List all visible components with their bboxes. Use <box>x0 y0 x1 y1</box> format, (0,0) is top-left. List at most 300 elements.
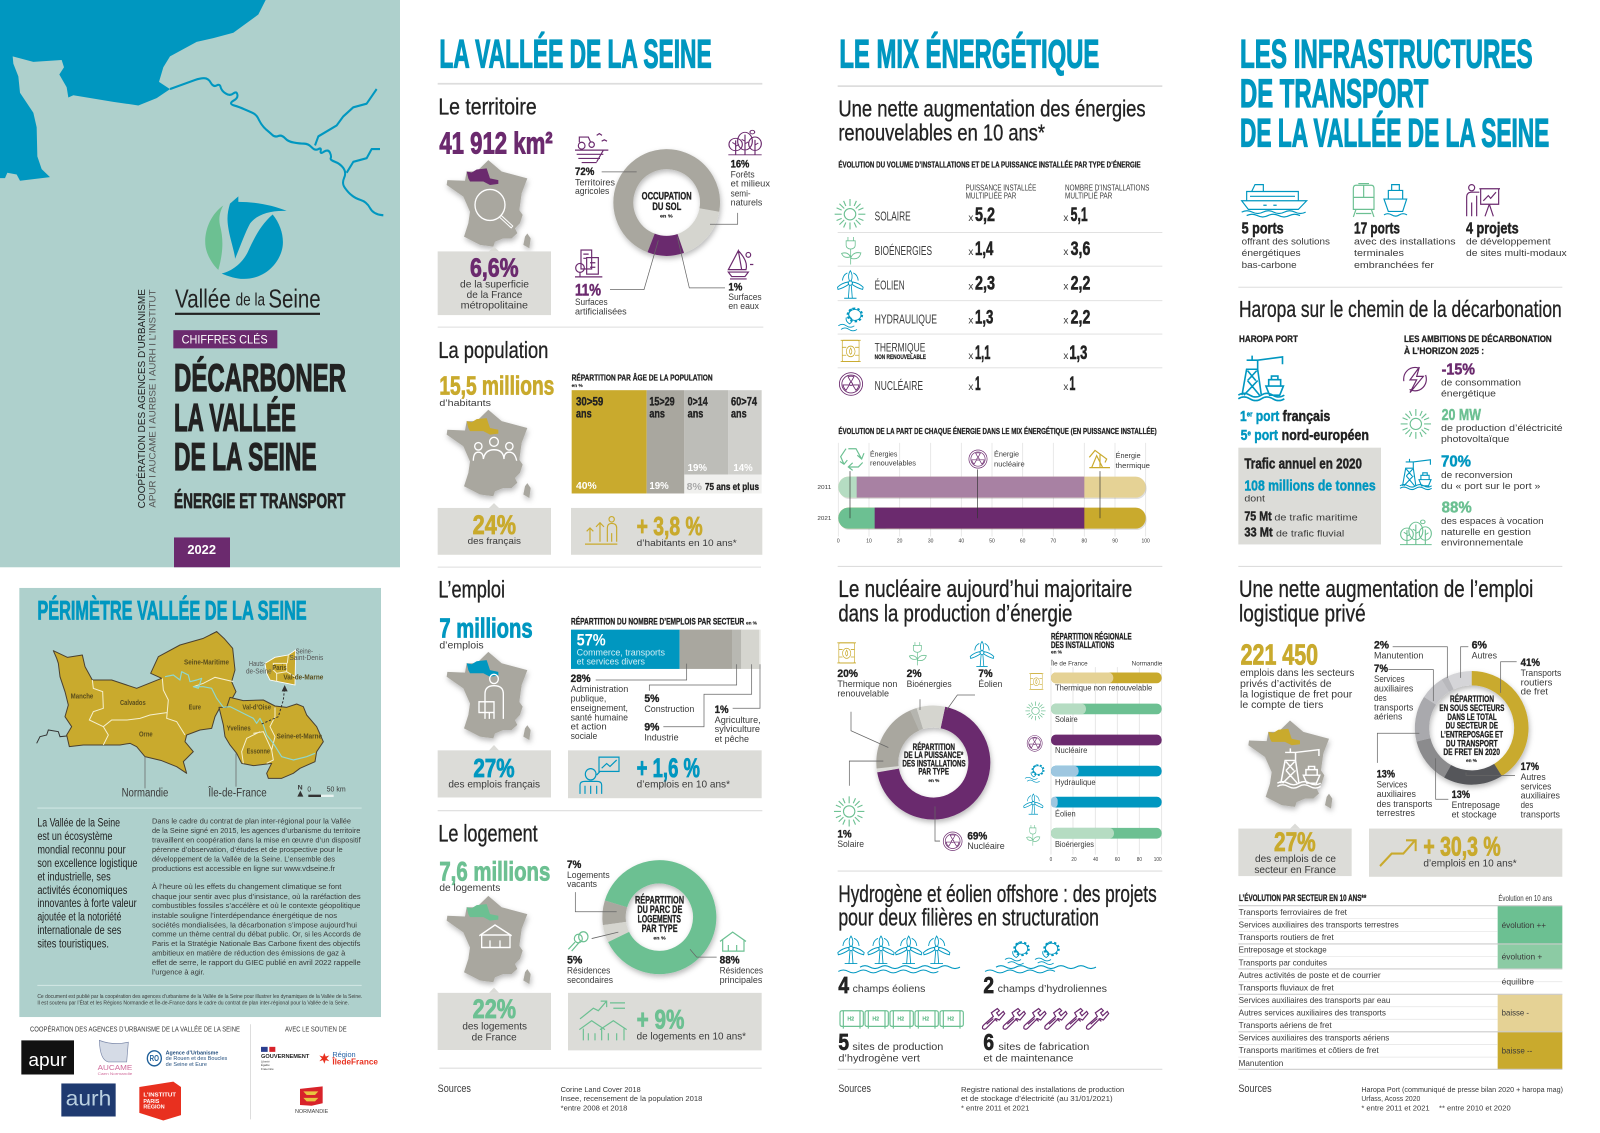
map of regions and departments: Paris <box>272 665 287 672</box>
stat: 4 projets <box>1466 185 1567 259</box>
label: résidences principales <box>690 949 763 985</box>
label: manutention <box>1374 640 1447 678</box>
map of regions and departments: Essonne <box>247 749 270 756</box>
bar chart: répartition régionale: Normandie <box>1132 661 1163 668</box>
partner logos: GOUVERNEMENT <box>261 1054 309 1060</box>
callout: +3,8% <box>571 508 762 555</box>
table: évolution par type d'énergie: 1 <box>1069 374 1076 395</box>
label: autres services: Autres <box>1521 772 1546 782</box>
callout: +1,6%: + 1,6 % <box>637 752 700 783</box>
icon: house <box>720 932 746 951</box>
key figure: 221 450 emplois: 221 450 <box>1241 638 1318 670</box>
heading: renouvelables en 10 ans* <box>838 119 1045 146</box>
table: évolution par type d'énergie: x <box>1063 281 1068 293</box>
text block: context: chaque jour sentir avec plus d’insistance, où la raréfaction des <box>152 894 361 901</box>
bar chart: part de chaque énergie: 90 <box>1112 539 1118 545</box>
stacked bar: emplois par secteur: Construction <box>644 704 695 714</box>
block: ambitions de décarbonation: environnementale <box>1441 537 1523 549</box>
block: ambitions de décarbonation: photovoltaïque <box>1441 434 1509 445</box>
text block: context: comme un thème central du débat public. Or, si les Accords de <box>152 931 361 939</box>
stat: sites hydrogène vert: H2 <box>947 1017 954 1023</box>
region labels: Normandie <box>122 786 168 800</box>
table: évolution par secteur: Transports routiers de fret <box>1239 933 1335 942</box>
block: ambitions de décarbonation: LES AMBITIONS DE DÉCARBONATION <box>1404 334 1552 345</box>
partner logos: Caen Normandie <box>98 1072 132 1076</box>
table: évolution par type d'énergie: x <box>968 315 973 326</box>
text block: intro: ajoutée et la notoriété <box>37 911 121 924</box>
stat: sites hydrogène vert: H2 <box>897 1017 904 1023</box>
map of regions and departments: Seine-et-Marne <box>277 734 322 741</box>
bar chart: part de chaque énergie: 100 <box>1141 539 1150 545</box>
treemap: répartition par âge: 75 ans et plus <box>705 482 759 493</box>
donut chart: sous secteurs <box>1403 659 1540 797</box>
label: thermique <box>837 643 897 747</box>
callout: trafic annuel: de trafic fluvial <box>1276 528 1344 540</box>
table: évolution par secteur: Évolution en 10 ans <box>1498 893 1552 903</box>
stat: sites hydrogène vert: H2 <box>922 1017 929 1023</box>
bar chart: part de chaque énergie: 0 <box>837 539 840 545</box>
table: évolution par type d'énergie: x <box>968 351 973 362</box>
label: entreposage: et stockage <box>1452 809 1497 820</box>
block: ambitions de décarbonation: -15% <box>1442 361 1475 379</box>
panel: Les infrastructures de transport <box>1238 33 1567 549</box>
callout: 6,6%: de la France <box>467 290 523 301</box>
label: logements vacants: vacants <box>567 879 597 889</box>
label: services terrestres <box>1377 733 1432 818</box>
stat: 17 ports <box>1353 184 1456 271</box>
table: évolution par secteur: L’ÉVOLUTION PAR SECTEUR EN 10 ANS** <box>1239 893 1367 903</box>
logo wordmark <box>175 285 321 315</box>
stat: champs d'hydroliennes: champs d’hydroliennes <box>998 984 1107 995</box>
stat: sites hydrogène vert <box>838 1011 963 1065</box>
heading: hydrogène et éolien offshore <box>838 880 1157 931</box>
partner logos: AUCAME <box>98 1063 132 1072</box>
table: évolution par type d'énergie: x <box>968 281 973 293</box>
title: ÉNERGIE ET TRANSPORT <box>174 489 346 513</box>
stat: 5 ports: bas-carbone <box>1242 260 1297 271</box>
table: évolution par type d'énergie: x <box>968 213 973 224</box>
stat: champs éoliens: 4 <box>838 972 850 998</box>
callout: 24% <box>438 503 551 555</box>
table: évolution par type d'énergie: x <box>968 382 973 393</box>
text block: intro: est un écosystème <box>37 831 112 843</box>
table: évolution par type d'énergie: 1,1 <box>975 343 991 364</box>
label: transports routiers: Transports <box>1521 668 1561 678</box>
vertical credit <box>135 289 158 508</box>
label: territoires agricoles: agricoles <box>575 186 610 196</box>
sources: Haropa Port (communiqué de presse bilan 2020 + haropa mag) <box>1361 1085 1563 1094</box>
table: évolution par secteur: Services auxiliaires des transports aériens <box>1239 1033 1390 1043</box>
partner logos: PARIS <box>143 1099 160 1105</box>
table: évolution par type d'énergie: 1 <box>975 374 981 395</box>
label: autres: 6% <box>1472 640 1487 652</box>
label: services aériens: auxiliaires <box>1374 683 1413 693</box>
map of regions and departments: Manche <box>71 693 93 700</box>
label: manutention: Manutention <box>1374 650 1424 661</box>
table: évolution par type d'énergie: 2,2 <box>1071 307 1090 328</box>
stat: sites de fabrication <box>982 1009 1109 1065</box>
treemap: répartition par âge: ans <box>688 407 703 421</box>
bar chart: répartition régionale: Nucléaire <box>1055 746 1088 755</box>
heading: le territoire: Le territoire <box>438 93 537 120</box>
label: forêts: naturels <box>731 197 763 208</box>
bar chart: part de chaque énergie: 2021 <box>817 516 832 522</box>
donut chart: puissance par type: DE LA PUISSANCE* <box>904 750 964 760</box>
heading: Une nette augmentation des énergies <box>838 95 1146 121</box>
vertical credit: APUR I AUCAME I AURBSE I AURH I L’INSTITUT <box>147 289 158 508</box>
map of regions and departments: de-Seine <box>246 668 272 675</box>
bar chart: répartition régionale: 20 <box>1071 857 1077 863</box>
block: Haropa port: nord-européen <box>1282 428 1369 444</box>
label: autres services: des <box>1521 800 1533 810</box>
text block: intro: et industrielle, ses <box>37 871 111 884</box>
partner logos: Région <box>332 1050 356 1059</box>
block: ambitions de décarbonation: 88% <box>1442 499 1472 516</box>
text block: context: À l’heure où les effets du changement climatique se font <box>152 882 341 891</box>
table: évolution par type d'énergie: x <box>968 247 973 258</box>
stat: sites hydrogène vert: d’hydrogène vert <box>838 1053 920 1065</box>
sources: Sources <box>838 1084 871 1095</box>
bar chart: part de chaque énergie: 10 <box>866 539 872 545</box>
key figure: habitants <box>439 372 554 409</box>
bar chart: répartition régionale: 60 <box>1115 857 1120 863</box>
logo wordmark: Vallée <box>175 285 231 314</box>
partner logos: NORMANDIE <box>295 1109 329 1115</box>
region labels: Île-de-France <box>208 785 267 800</box>
stat: champs d'hydroliennes: 2 <box>983 972 994 998</box>
scale bar: 50 km <box>327 787 346 794</box>
bar chart: répartition régionale: Hydraulique <box>1055 778 1096 787</box>
sources <box>1238 1084 1563 1112</box>
label: services terrestres: des transports <box>1377 799 1432 809</box>
donut chart: puissance par type: RÉPARTITION <box>913 742 955 752</box>
treemap: répartition par âge: ans <box>649 407 665 421</box>
bar chart: part de chaque énergie: nucléaire <box>994 459 1025 468</box>
partner logos: RO <box>150 1054 159 1063</box>
stacked bar: emplois par secteur <box>571 616 761 744</box>
stacked bar: emplois par secteur: 57% <box>577 632 606 650</box>
block: ambitions de décarbonation: du « port sur le port » <box>1441 481 1540 492</box>
label: transports routiers: de fret <box>1521 686 1549 697</box>
sources: Insee, recensement de la population 2018 <box>561 1094 702 1103</box>
tag: year: 2022 <box>187 543 216 557</box>
heading: hydrogène et éolien offshore: Hydrogène et éolien offshore : des projets <box>838 880 1157 907</box>
stacked bar: emplois par secteur: RÉPARTITION DU NOMBRE D’EMPLOIS PAR SECTEUR <box>571 616 745 626</box>
stat: 5 ports: 5 ports <box>1242 220 1284 238</box>
tag: chiffres clés: CHIFFRES CLÉS <box>182 333 268 346</box>
map: France with worker <box>447 652 531 740</box>
stat: 17 ports: 17 ports <box>1354 220 1400 238</box>
donut chart: puissance par type: PAR TYPE <box>918 766 949 777</box>
label: surfaces artificialisées: Surfaces <box>575 297 608 307</box>
bar chart: répartition régionale: 40 <box>1093 857 1099 863</box>
table: évolution par secteur <box>1238 893 1562 1069</box>
partner logos: apur <box>28 1050 67 1070</box>
stat: 5 ports: offrant des solutions <box>1242 236 1330 248</box>
sources: Registre national des installations de production <box>961 1085 1124 1094</box>
label: surfaces en eaux <box>677 237 762 311</box>
bar chart: répartition régionale: Solaire <box>1055 715 1078 724</box>
label: bioénergies <box>907 642 952 710</box>
callout: 27%: secteur en France <box>1254 865 1336 876</box>
donut chart: sous secteurs: RÉPARTITION <box>1450 694 1494 704</box>
bar chart: part de chaque énergie: Énergie <box>994 450 1019 459</box>
key figure: logements <box>439 856 550 894</box>
treemap: répartition par âge: 19% <box>649 481 669 492</box>
table: évolution par secteur: Transports maritimes et côtiers de fret <box>1239 1046 1380 1055</box>
icon: sailboat <box>728 251 753 279</box>
stat: sites hydrogène vert: 5 <box>838 1029 849 1055</box>
table: évolution par secteur: Autres activités de poste et de courrier <box>1239 971 1381 980</box>
key figure: 221 450 emplois: emplois dans les secteurs <box>1240 668 1354 679</box>
callout: +9%: + 9% <box>637 1004 684 1035</box>
bar chart: part de chaque énergie: 50 <box>989 539 995 545</box>
label: solaire: 1% <box>837 829 852 841</box>
sources: Sources <box>438 1084 471 1095</box>
callout: +3,8%: + 3,8 % <box>637 512 703 541</box>
text block: intro: La Vallée de la Seine <box>37 817 120 830</box>
heading: l'emploi: L’emploi <box>438 576 505 603</box>
callout: 22% <box>438 987 551 1050</box>
heading: le logement: Le logement <box>438 820 538 847</box>
text block: context: effet de serre, le rapport du GIEC publié en avril 2022 rappelle <box>152 960 361 967</box>
label: transports routiers <box>1501 658 1561 697</box>
heading: nucléaire <box>838 575 1132 627</box>
treemap: répartition par âge: 0>14 <box>688 394 708 409</box>
callout: 6,6% <box>438 247 551 315</box>
icon: keys <box>568 932 588 951</box>
logo wordmark: de la <box>236 290 266 310</box>
label: services aériens: aériens <box>1374 711 1402 722</box>
callout: +1,6%: d’emplois en 10 ans* <box>637 779 730 791</box>
label: éolien <box>947 641 1002 710</box>
stat: sites hydrogène vert: sites de production <box>852 1042 943 1053</box>
stat: 4 projets: de développement <box>1466 236 1551 248</box>
text block: context: instable souligne l’interdépendance énergétique de nos <box>152 913 338 920</box>
callout: trafic annuel: 33 Mt <box>1244 525 1273 540</box>
stacked bar: emplois par secteur: 9% <box>644 722 659 734</box>
callout: 27% <box>1238 824 1352 876</box>
stacked bar: emplois par secteur: Industrie <box>644 732 679 742</box>
key figure: logements: 7,6 millions <box>439 856 550 887</box>
key figure: 221 450 emplois: privés d’activités de <box>1240 679 1332 690</box>
callout: 22%: de France <box>472 1032 517 1043</box>
treemap: répartition par âge: 60>74 <box>731 394 757 409</box>
callout: trafic annuel: de trafic maritime <box>1274 512 1358 523</box>
callout: 24%: 24% <box>473 509 516 540</box>
treemap: répartition par âge: 40% <box>576 481 597 492</box>
label: surfaces artificialisées: 11% <box>575 281 601 300</box>
label: autres services: services <box>1521 781 1551 791</box>
block: Haropa port: e <box>1247 428 1251 437</box>
donut chart: parc de logements: PAR TYPE <box>642 924 678 935</box>
bar chart: répartition régionale: Île de France <box>1050 661 1088 668</box>
title: DE LA SEINE <box>174 435 317 478</box>
stacked bar: emplois par secteur: et pêche <box>715 734 749 744</box>
text block: context: ambitieux en matière de réduction des émissions de gaz à <box>152 950 345 957</box>
map: river Seine <box>170 78 383 215</box>
donut chart: parc de logements <box>599 857 720 978</box>
logo wordmark: Seine <box>268 285 321 314</box>
label: résidences secondaires: 5% <box>567 955 582 967</box>
table: évolution par type d'énergie: SOLAIRE <box>875 209 911 224</box>
callout: 24%: des français <box>468 536 521 547</box>
bar chart: part de chaque énergie: Énergie <box>1116 451 1141 460</box>
bar chart: part de chaque énergie: Énergies <box>870 450 898 459</box>
donut chart: sous secteurs: DU SECTEUR DE <box>1446 720 1498 731</box>
text block: intro: innovantes à forte valeur <box>37 897 137 910</box>
sources: Urfass, Acoss 2020 <box>1361 1094 1420 1103</box>
text block: intro: son excellence logistique <box>37 858 137 870</box>
block: Haropa port: français <box>1283 409 1330 425</box>
bar chart: répartition régionale: en % <box>1051 649 1062 655</box>
sources <box>438 1084 702 1112</box>
label: logements vacants: 7% <box>567 860 581 871</box>
callout: 27%: 27% <box>1274 828 1316 857</box>
donut chart: puissance par type <box>873 702 994 823</box>
donut chart: parc de logements: en % <box>653 935 666 940</box>
map of regions and departments: Seine-Maritime <box>184 659 229 666</box>
label: résidences principales: principales <box>720 975 762 985</box>
callout: trafic annuel <box>1238 448 1381 544</box>
label: bioénergies: Bioénergies <box>907 679 952 689</box>
table: évolution par secteur: baisse - <box>1502 1008 1529 1018</box>
label: territoires agricoles: 72% <box>575 166 595 178</box>
heading: logistique privé <box>1239 600 1366 627</box>
label: services terrestres: terrestres <box>1377 808 1415 818</box>
panel: cover <box>0 0 400 567</box>
label: bioénergies: 2% <box>907 669 922 680</box>
bar chart: part de chaque énergie: thermique <box>1116 461 1150 470</box>
block: Haropa port: port <box>1252 409 1279 425</box>
table: évolution par secteur: Transports ferroviaires de fret <box>1239 908 1348 917</box>
table: évolution par type d'énergie: 2,2 <box>1071 273 1090 295</box>
donut chart: puissance par type: DES INSTALLATIONS <box>902 758 966 768</box>
partner logos: AVEC LE SOUTIEN DE <box>285 1024 347 1033</box>
label: manutention: 2% <box>1374 640 1389 652</box>
callout: trafic annuel: Trafic annuel en 2020 <box>1244 456 1362 472</box>
table: évolution par type d'énergie: x <box>1063 213 1068 224</box>
treemap: répartition par âge: ans <box>731 407 747 421</box>
treemap: répartition par âge: ans <box>576 407 592 421</box>
label: services aériens: des <box>1374 693 1387 703</box>
text block: context: Dans le cadre du contrat de plan inter-régional pour la Vallée <box>152 818 351 826</box>
label: surfaces en eaux: Surfaces <box>728 292 762 302</box>
block: Haropa port: port <box>1251 428 1278 444</box>
callout: 6,6%: 6,6% <box>470 254 519 283</box>
bar chart: répartition régionale: RÉPARTITION RÉGIONALE <box>1051 631 1132 641</box>
label: forêts: semi- <box>731 188 751 198</box>
callout: 27% <box>438 745 551 797</box>
stacked bar: emplois par secteur: et services divers <box>577 656 645 667</box>
callout: 27%: des emplois de ce <box>1255 854 1336 865</box>
section title: LA VALLÉE DE LA SEINE <box>439 32 712 77</box>
donut chart: sous secteurs: DE FRET EN 2020 <box>1443 747 1500 757</box>
treemap: répartition par âge: 14% <box>733 463 753 474</box>
label: nucléaire: 69% <box>967 831 987 842</box>
label: logements vacants <box>567 860 617 912</box>
treemap: répartition par âge: 15>29 <box>649 394 675 409</box>
block: Haropa port: 5 <box>1241 428 1249 444</box>
map of regions and departments: Saint-Denis <box>289 655 324 662</box>
table: évolution par secteur: Transports aériens de fret <box>1239 1021 1333 1030</box>
text block: context: de la Seine signé en 2015, les agences d’urbanisme du territoire <box>152 828 360 835</box>
text block: context: Paris et la Stratégie Nationale Bas Carbone fixent des objectifs <box>152 941 361 948</box>
stat: 17 ports: terminales <box>1354 248 1404 259</box>
map: France with people <box>447 410 531 498</box>
table: évolution par type d'énergie: 3,6 <box>1071 239 1090 260</box>
map of regions and departments: Calvados <box>120 700 146 707</box>
stat: sites hydrogène vert: H2 <box>847 1017 854 1023</box>
label: territoires agricoles: Territoires <box>575 177 616 187</box>
block: ambitions de décarbonation: À L’HORIZON 2025 : <box>1404 346 1484 357</box>
stat: sites de fabrication: 6 <box>983 1029 994 1055</box>
label: surfaces en eaux: en eaux <box>728 301 760 311</box>
donut chart: sous secteurs: DANS LE TOTAL <box>1447 712 1497 722</box>
block: ambitions de décarbonation: naturelle en gestion <box>1441 527 1531 538</box>
map of regions and departments: Eure <box>189 704 201 711</box>
label: services terrestres: 13% <box>1377 769 1395 781</box>
table: évolution par type d'énergie: NON RENOUVELABLE <box>875 354 926 361</box>
panel: La Vallée de la Seine, territoire et population <box>438 32 771 555</box>
treemap: répartition par âge: 19% <box>688 463 707 474</box>
label: thermique: 20% <box>837 669 858 680</box>
icon: buildings <box>575 250 602 277</box>
sources: * entre 2011 et 2021 <box>1361 1103 1430 1112</box>
title <box>174 357 346 513</box>
bar chart: part de chaque énergie <box>817 426 1157 545</box>
stacked bar: emplois par secteur: santé humaine <box>571 712 628 722</box>
donut chart: parc de logements: DU PARC DE <box>637 905 682 916</box>
donut chart: occupation du sol <box>611 147 723 258</box>
label: entreposage <box>1436 758 1500 820</box>
table: évolution par secteur: évolution ++ <box>1502 921 1547 930</box>
table: évolution par type d'énergie: BIOÉNERGIES <box>875 243 932 258</box>
treemap: répartition par âge: 8% <box>687 482 702 493</box>
table: évolution par secteur: équilibre <box>1502 977 1534 986</box>
label: transports routiers: 41% <box>1521 658 1540 669</box>
stat: 17 ports: embranchées fer <box>1354 260 1434 271</box>
table: évolution par type d'énergie: 1,3 <box>975 307 993 328</box>
label: résidences principales: Résidences <box>720 965 763 976</box>
partner logos: Fraternité <box>261 1067 274 1071</box>
callout: 22%: 22% <box>473 993 516 1024</box>
label: surfaces en eaux: 1% <box>728 281 743 293</box>
partner logos: aurh <box>66 1087 111 1111</box>
text block: context: développement de la Vallée de la Seine. L’ensemble des <box>152 856 336 864</box>
donut chart: sous secteurs: EN SOUS SECTEURS <box>1439 703 1504 713</box>
label: services aériens <box>1374 664 1433 722</box>
label: éolien: 7% <box>978 669 993 680</box>
callout: 27%: 27% <box>473 754 515 783</box>
label: services terrestres: Services <box>1377 779 1407 790</box>
stacked bar: emplois par secteur: sociale <box>571 731 598 741</box>
label: forêts <box>710 158 771 224</box>
bar chart: part de chaque énergie: 2011 <box>817 485 832 491</box>
table: évolution par type d'énergie: 5,1 <box>1071 205 1088 226</box>
icon: tractor <box>575 134 608 163</box>
stat: champs d'hydroliennes <box>983 942 1107 998</box>
bar chart: répartition régionale: DES INSTALLATIONS <box>1051 640 1114 650</box>
text block: context: l’urgence à agir. <box>152 969 205 976</box>
bar chart: part de chaque énergie: 20 <box>897 539 903 545</box>
label: autres services: 17% <box>1521 762 1539 773</box>
label: forêts: et milieux <box>731 179 771 189</box>
sources <box>838 1084 1124 1112</box>
stacked bar: emplois par secteur: sylviculture <box>715 724 760 734</box>
donut chart: occupation du sol: OCCUPATION <box>642 191 692 203</box>
callout: trafic annuel: 108 millions de tonnes <box>1244 479 1376 495</box>
